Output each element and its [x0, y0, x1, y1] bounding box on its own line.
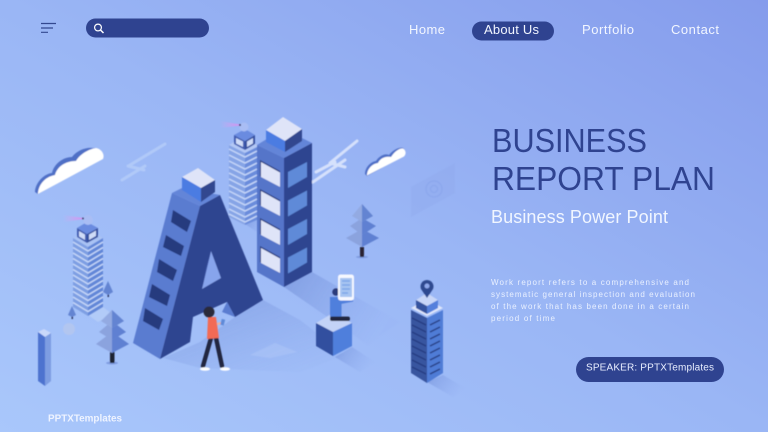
subtitle: Business Power Point — [491, 207, 668, 227]
person on cube with phone — [316, 274, 354, 356]
sphere — [63, 323, 75, 335]
illustration: isometric city — [35, 117, 465, 397]
body text: systematic general inspection and evaluation — [491, 290, 695, 299]
brand label: PPTXTemplates — [48, 414, 122, 424]
streak right — [313, 141, 357, 182]
pin tower — [411, 280, 443, 383]
icon: menu — [41, 24, 56, 32]
navigation: Contact — [671, 22, 719, 37]
streak left — [122, 144, 165, 180]
title: REPORT PLAN — [492, 161, 715, 198]
navigation: About Us — [484, 22, 540, 37]
A windows — [143, 210, 191, 330]
letter A building — [133, 168, 263, 359]
title — [492, 123, 715, 198]
striped tower back — [220, 121, 257, 225]
navigation: Portfolio — [582, 22, 634, 37]
windows — [260, 160, 307, 274]
navigation — [409, 22, 719, 40]
body text: Work report refers to a comprehensive and — [491, 278, 689, 287]
cloud left — [35, 148, 104, 194]
search bar — [86, 18, 209, 38]
cloud right — [365, 148, 406, 176]
tall building — [257, 117, 312, 287]
speaker badge — [576, 357, 724, 382]
pine tree left — [96, 310, 129, 364]
striped tower left — [63, 215, 103, 316]
ground shadows — [88, 218, 465, 397]
body text: period of time — [491, 314, 556, 323]
pillar — [38, 329, 51, 386]
faint target panel — [411, 163, 455, 217]
title: BUSINESS — [492, 123, 647, 160]
pine tree right — [346, 204, 379, 258]
speaker badge: SPEAKER: PPTXTemplates — [586, 362, 714, 374]
body text — [491, 278, 695, 323]
person walking — [200, 306, 230, 371]
navigation: Home — [409, 22, 445, 37]
body text: of the work that has been done in a certain — [491, 302, 689, 311]
small trees left — [68, 281, 113, 319]
